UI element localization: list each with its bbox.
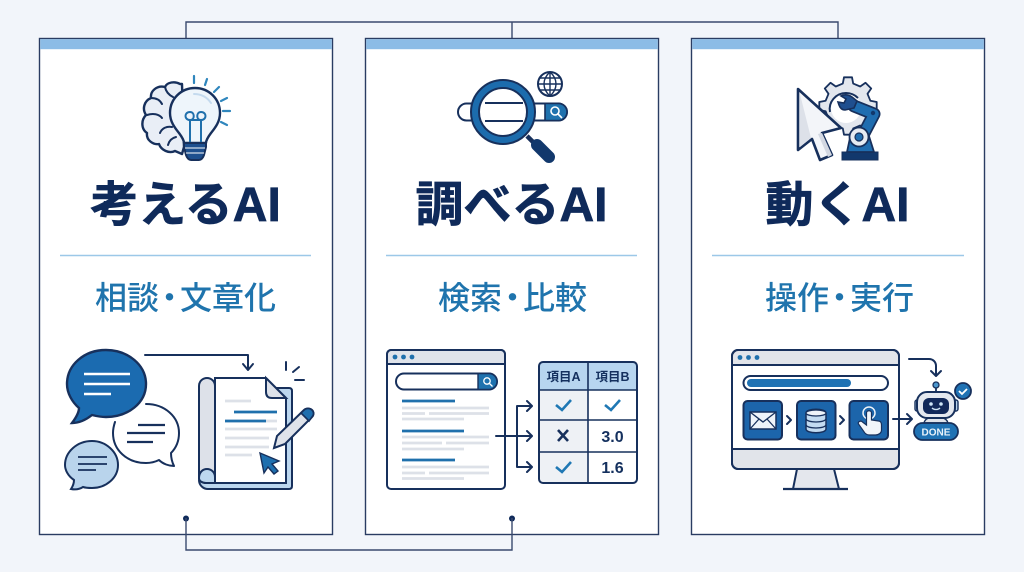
connector dot [509,516,515,522]
heading: 調べるAI [415,179,608,232]
heading: 考えるAI [90,179,281,232]
heading: 動くAI [765,179,910,232]
arrow to robot [893,414,912,424]
connector: top line [186,22,838,38]
icon: robot DONE [914,382,971,440]
panel: 調べるAI [366,38,658,534]
illustration: monitor to robot [732,350,971,489]
icon: brain and light bulb [142,76,230,160]
browser window [387,350,505,489]
icon: magnifier over search bar with globe [458,72,567,157]
arrow [145,355,253,370]
panel: 動くAI [692,38,984,534]
tile: mail [744,401,782,440]
monitor [732,350,899,489]
illustration: chat to document [65,350,314,489]
arrow down [909,359,941,376]
icon: speech bubbles [65,350,179,489]
connector dot [183,516,189,522]
icon: document with pencil [199,362,314,489]
tile: touch [850,401,888,440]
icon: robot DONE: DONE [922,428,951,438]
subheading: 検索・比較 [438,280,587,316]
comparison table: 1.6 [601,460,624,477]
subheading: 相談・文章化 [95,280,276,316]
illustration: browser to table [387,350,637,489]
comparison table: 3.0 [601,429,624,446]
arrows [496,401,532,472]
comparison table: 項目A [546,370,581,384]
icon: cursor, gear and robot arm [798,77,878,160]
subheading: 操作・実行 [765,280,914,316]
tile: database [797,401,836,440]
comparison table: 項目B [595,370,630,384]
comparison table [539,362,637,483]
panel: 考えるAI [40,38,332,534]
connector: bottom line [186,518,512,550]
